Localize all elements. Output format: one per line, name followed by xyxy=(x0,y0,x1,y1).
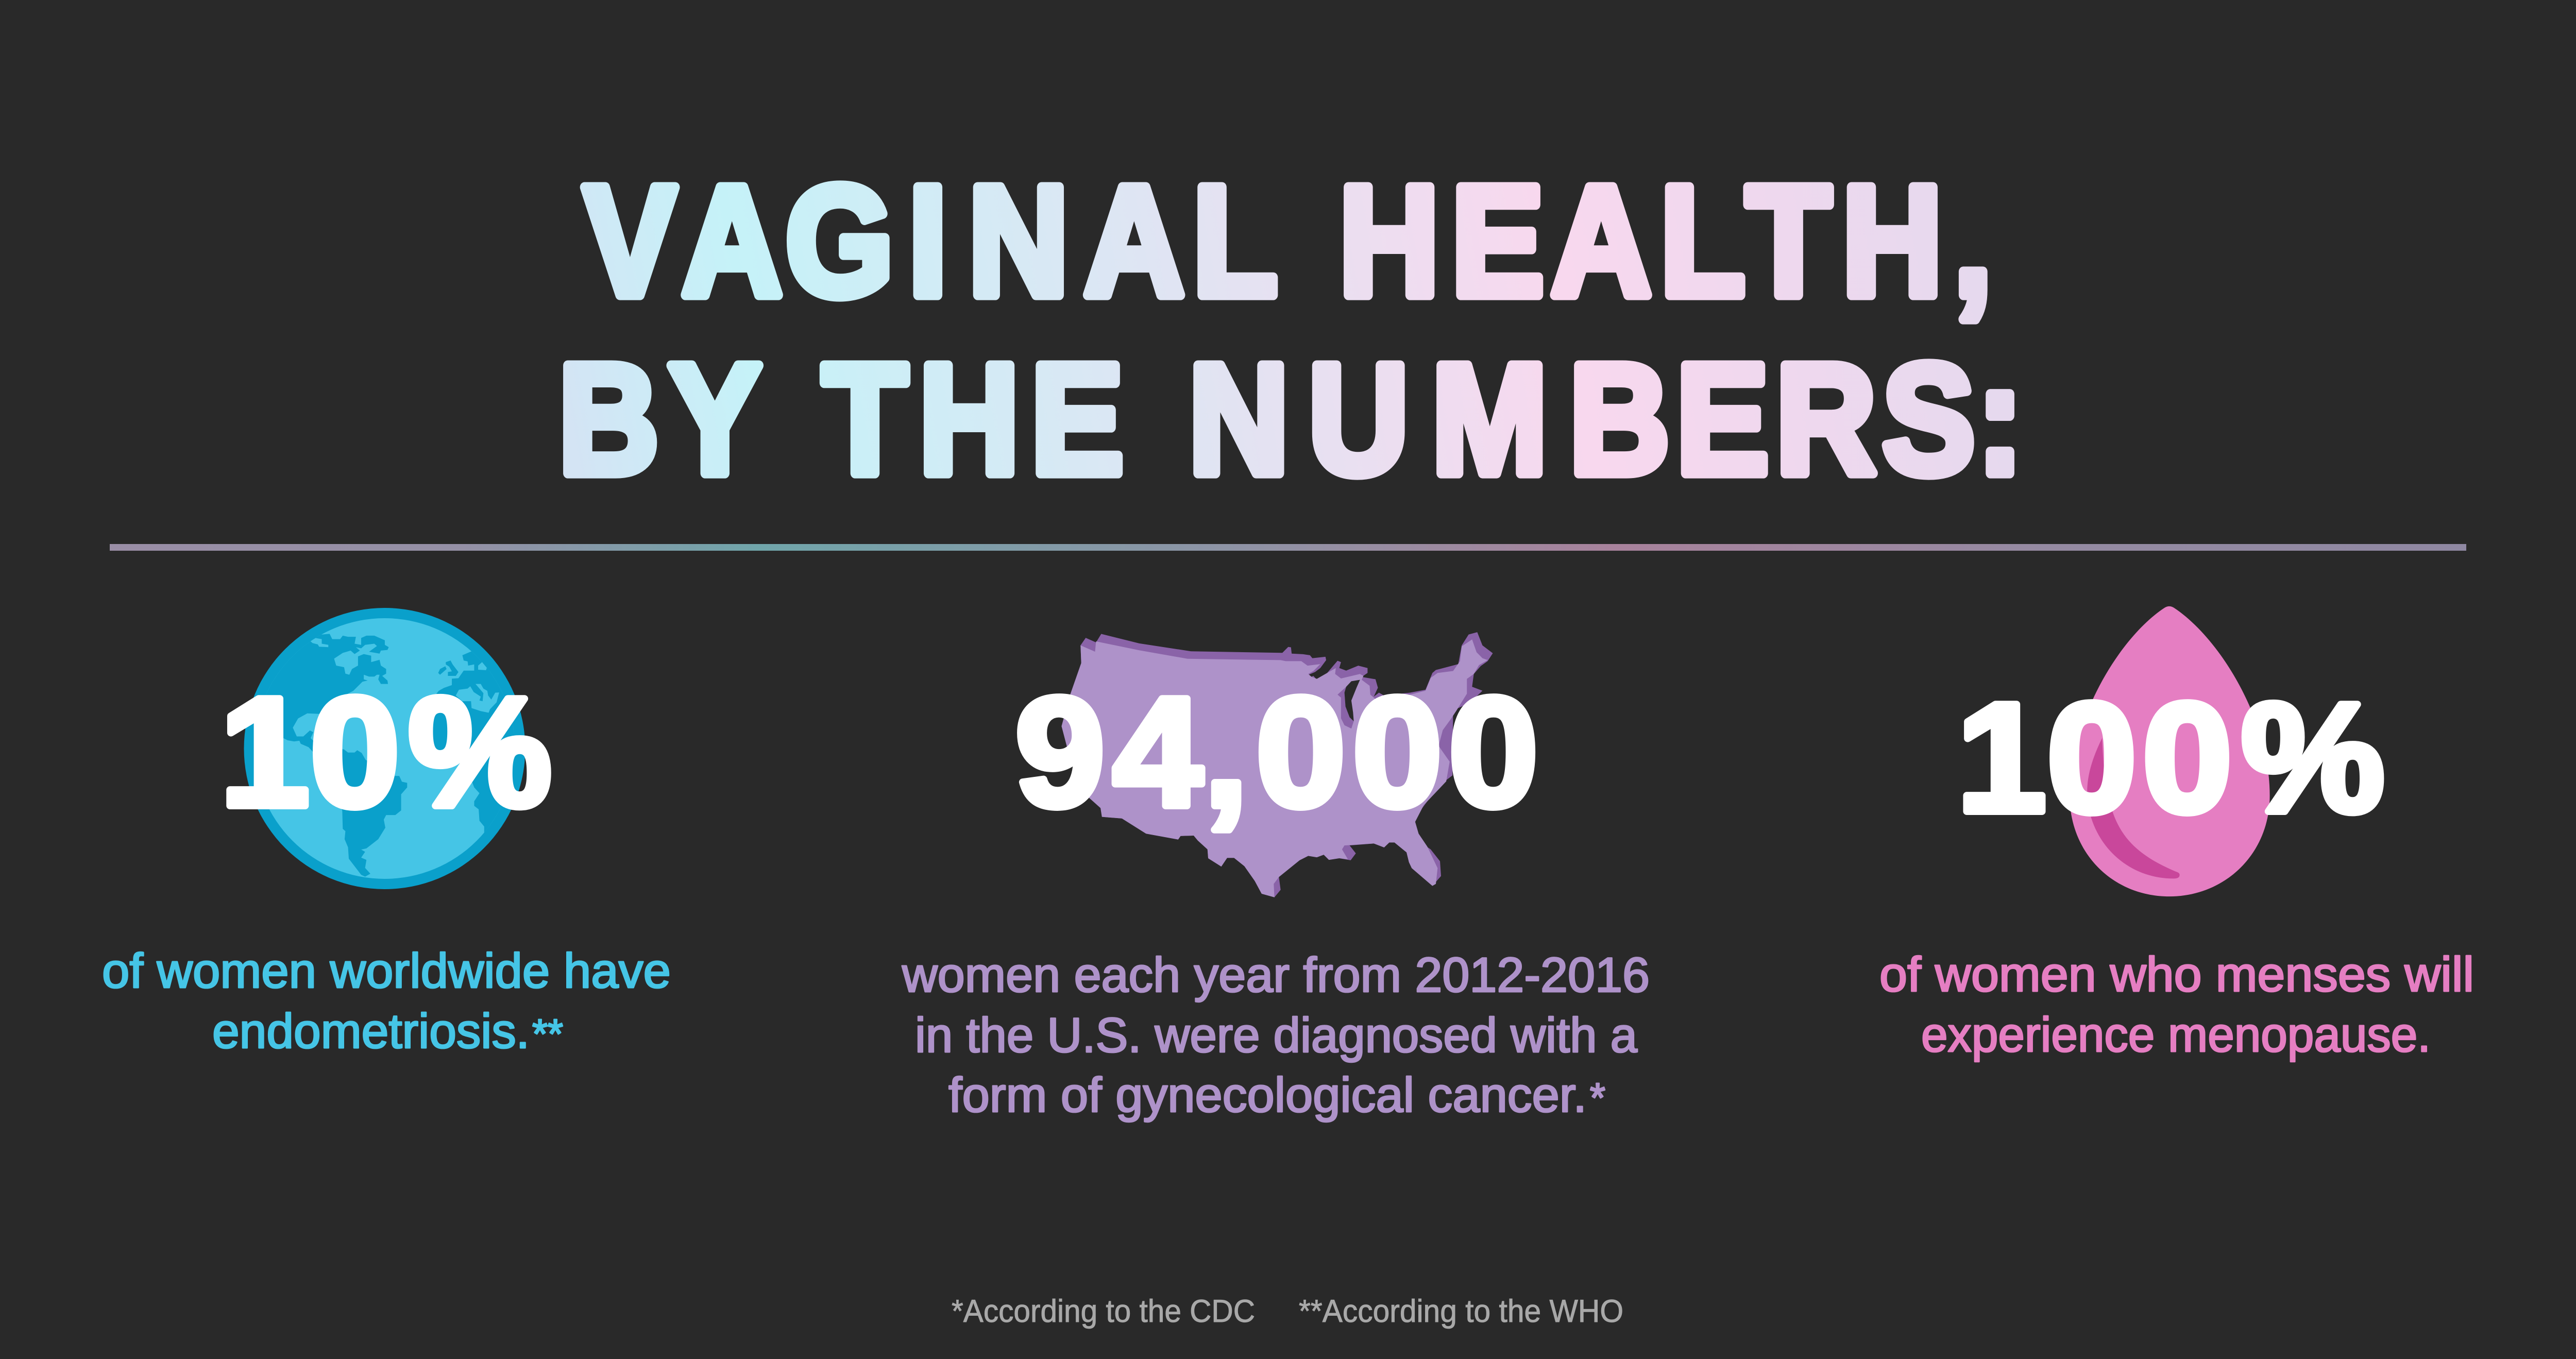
title: VAGINAL HEALTH, xyxy=(584,154,1992,329)
panel: endometriosis xyxy=(102,608,671,1059)
stat: 100%: 100% xyxy=(1957,671,2384,844)
icon: drop xyxy=(2070,606,2270,896)
caption: gynecological cancer: * xyxy=(1590,1075,1605,1120)
footnotes: *According to the CDC xyxy=(952,1294,1255,1329)
panel: menopause xyxy=(1879,606,2474,1062)
icon: map of the United States xyxy=(1061,632,1493,897)
caption: menopause: experience menopause. xyxy=(1921,1008,2431,1062)
stat: 10%: 10% xyxy=(220,665,552,839)
caption: endometriosis: ** xyxy=(532,1011,563,1057)
stat: 94,000: 94,000 xyxy=(1015,665,1538,839)
divider xyxy=(110,544,2466,551)
caption: gynecological cancer: in the U.S. were diagnosed with a xyxy=(915,1008,1637,1063)
panel: gynecological cancer xyxy=(902,632,1650,1123)
footnotes: **According to the WHO xyxy=(1299,1294,1623,1329)
caption: gynecological cancer: women each year from 2012-2016 xyxy=(902,948,1650,1003)
caption: gynecological cancer: form of gynecological cancer. xyxy=(948,1068,1587,1123)
icon: globe xyxy=(244,608,525,889)
caption: menopause: of women who menses will xyxy=(1879,947,2474,1002)
title: BY THE NUMBERS: xyxy=(558,332,2023,507)
caption: endometriosis: of women worldwide have xyxy=(102,944,671,998)
caption: endometriosis: endometriosis. xyxy=(212,1004,530,1059)
